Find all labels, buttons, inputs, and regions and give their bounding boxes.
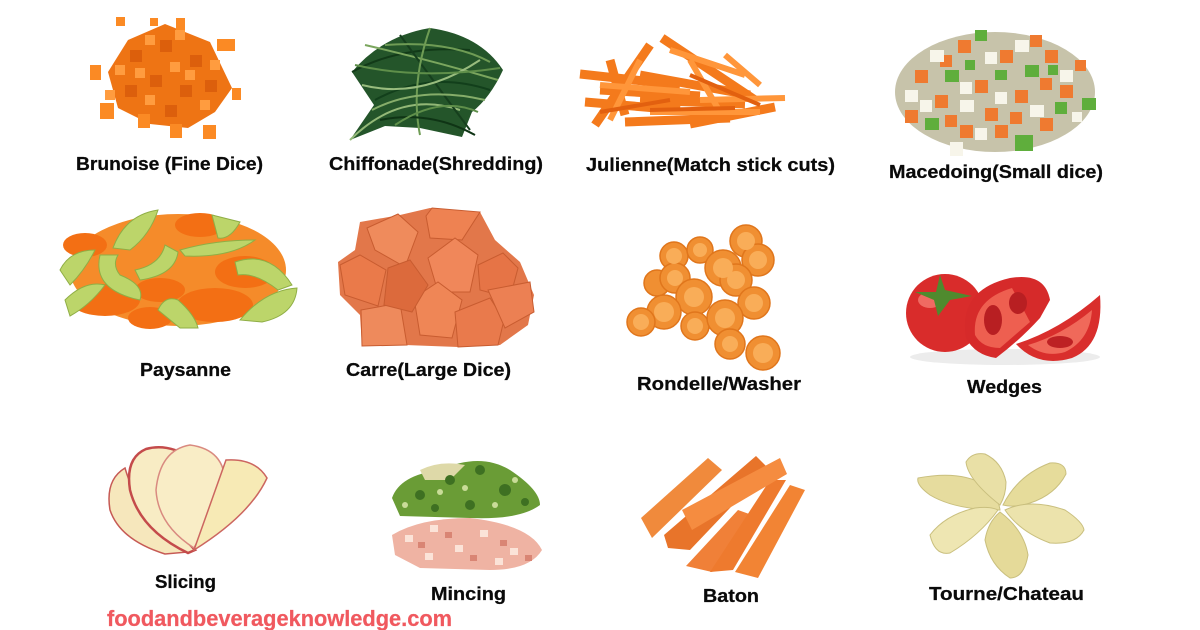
icon: carre large carrot dice xyxy=(338,208,534,347)
icon: paysanne carrot and celery slices xyxy=(60,210,297,329)
label: macedoing: Macedoing(Small dice) xyxy=(889,161,1103,182)
icon: julienne carrot sticks xyxy=(580,38,785,125)
icon: brunoise diced carrot xyxy=(90,17,241,139)
label: slicing: Slicing xyxy=(155,571,216,592)
label: mincing: Mincing xyxy=(431,583,506,604)
label: paysanne: Paysanne xyxy=(140,359,231,380)
icon: tourne garlic petals xyxy=(918,454,1084,578)
icon: chiffonade shredded greens xyxy=(350,28,503,140)
icon: minced herbs and meat xyxy=(392,461,542,570)
icon: macedoine mixed small dice xyxy=(895,30,1096,156)
icon: carrot batons xyxy=(641,456,805,578)
icon: sliced apple xyxy=(109,445,267,554)
label: brunoise: Brunoise (Fine Dice) xyxy=(76,153,263,174)
label: wedges: Wedges xyxy=(967,376,1042,397)
label: tourne: Tourne/Chateau xyxy=(929,583,1084,604)
label: julienne: Julienne(Match stick cuts) xyxy=(586,154,835,175)
label: chiffonade: Chiffonade(Shredding) xyxy=(329,153,543,174)
label: baton: Baton xyxy=(703,585,759,606)
label: rondelle: Rondelle/Washer xyxy=(637,373,801,394)
icon: rondelle carrot rounds xyxy=(627,225,780,370)
icon: tomato wedges xyxy=(906,274,1100,365)
label: carre: Carre(Large Dice) xyxy=(346,359,511,380)
